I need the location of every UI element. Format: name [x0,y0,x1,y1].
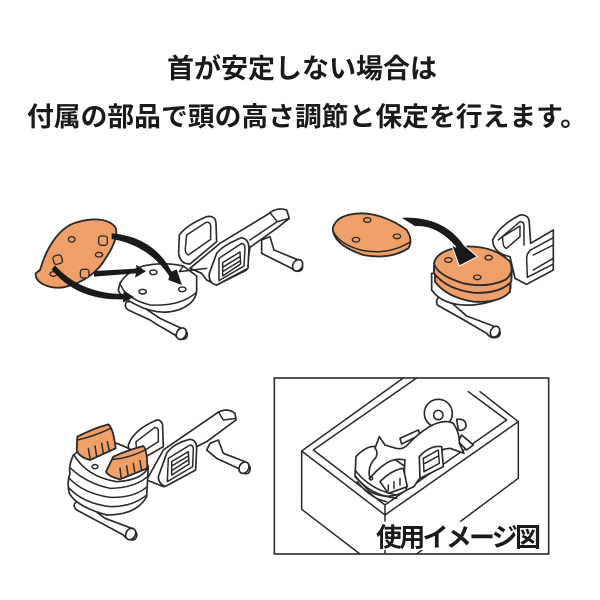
arrow: plate to stack [400,217,477,266]
chair frame [118,209,305,341]
seat base [432,273,511,305]
arrow: lower peg to left hole [52,265,134,303]
chair rear [128,410,251,487]
arrow: top peg to rear hole [112,233,182,285]
usage image panel [274,378,549,554]
ribbed base [68,443,148,515]
orange part [36,219,116,288]
chair rear [493,215,553,284]
bottom bar [437,296,502,339]
caption box [373,522,540,550]
illustration 3: head rests on chair [68,410,251,542]
stacked plates [434,247,512,302]
bottom bar [74,502,138,542]
chair in tub [355,430,473,502]
loose plate [333,213,411,256]
bathtub [302,378,518,554]
illustration 1: attaching the part to the seat [36,209,305,341]
seat holes [150,270,157,275]
title line 1: 首が安定しない場合は [167,53,437,84]
chair parts over the dog [369,446,443,493]
arrow: middle peg to front hole [94,265,146,278]
caption text: 使用イメージ図 [376,522,541,552]
title line 2: 付属の部品で頭の高さ調節と保定を行えます。 [27,102,587,132]
illustration 2: stacking plates [333,213,553,339]
panel frame [274,378,549,554]
right head support [106,446,147,479]
left head support [77,424,116,460]
dog [369,399,466,490]
